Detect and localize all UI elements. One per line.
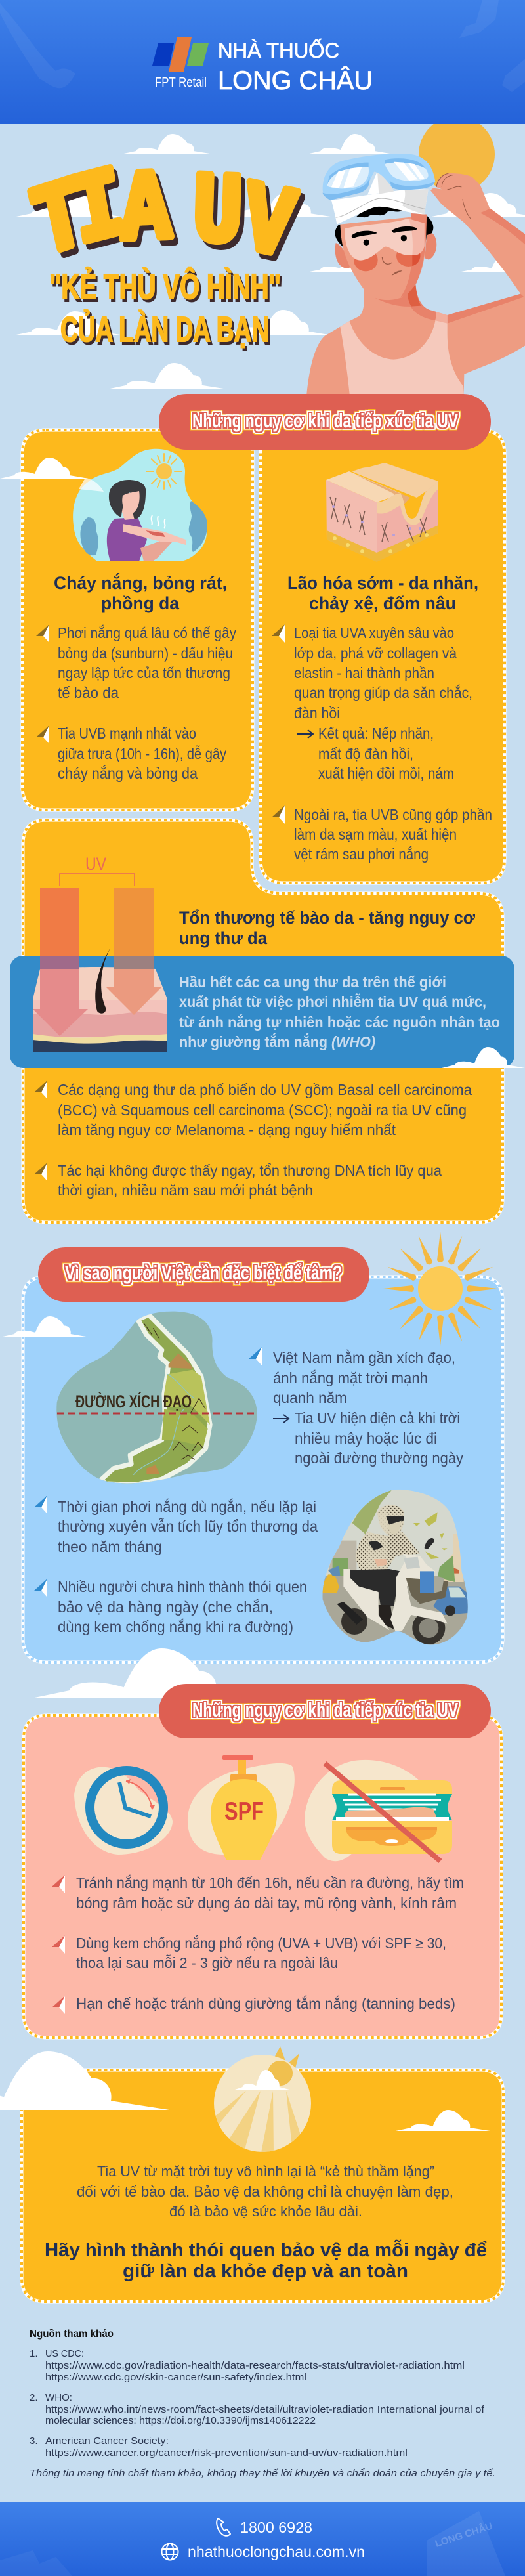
bullet: hidden harm <box>34 1162 442 1199</box>
arrow <box>273 1415 289 1423</box>
diagram: UV rays entering skin <box>33 854 167 1052</box>
icon: SPF bottle: SPF <box>224 1797 264 1826</box>
panel: why Vietnamese <box>0 1232 503 1662</box>
conclusion text: Tia UV từ mặt trời tuy vô hình lại là “kẻ thù thầm lặng” <box>97 2163 434 2179</box>
bullet: sunburn 2: giữa trưa (10h - 16h), dễ gây <box>58 745 226 762</box>
heading: chảy xệ, đốm nâu <box>309 593 456 613</box>
call to action <box>45 2239 487 2282</box>
bullet: aging 2: làm da sạm màu, xuất hiện <box>294 826 457 843</box>
bullet: avoid strong sun: Tránh nắng mạnh từ 10h đến 16h, nếu cần ra đường, hãy tìm <box>76 1874 464 1891</box>
bullet: cancer types <box>34 1081 472 1138</box>
reference 1: US CDC: <box>45 2348 84 2359</box>
logo: brand name: NHÀ THUỐC <box>218 39 339 62</box>
illustration: map with equator: ĐƯỜNG XÍCH ĐẠO <box>75 1391 192 1411</box>
bullet: sunscreen <box>52 1935 446 1971</box>
illustration: skin cross section <box>326 463 438 562</box>
storefront sign: LONG CHÂU <box>434 2520 494 2550</box>
result text: Kết quả: Nếp nhăn, <box>318 725 434 742</box>
footer banner <box>0 2502 525 2576</box>
bullet: aging 1: quan trọng giúp da săn chắc, <box>294 684 472 701</box>
bullet: daily habit: Nhiều người chưa hình thành thói quen <box>58 1578 307 1595</box>
callout text: như giường tắm nắng (WHO) <box>179 1033 375 1050</box>
bullet: sunburn 2: Tia UVB mạnh nhất vào <box>58 725 196 742</box>
heading: Tổn thương tế bào da - tăng nguy cơ <box>179 908 475 928</box>
bullet: tanning beds: Hạn chế hoặc tránh dùng giường tắm nắng (tanning beds) <box>76 1995 455 2012</box>
bullet: aging 1 <box>272 624 472 721</box>
disclaimer: Thông tin mang tính chất tham khảo, không thay thế lời khuyên và chẩn đoán của chuyên gia y tế. <box>30 2468 495 2479</box>
icon: SPF bottle <box>188 1755 295 1860</box>
panel: conclusion <box>0 2046 503 2302</box>
call to action: giữ làn da khỏe đẹp và an toàn <box>123 2261 408 2282</box>
reference 3 <box>30 2436 408 2458</box>
bullet: near equator <box>249 1347 455 1406</box>
panel: premature aging <box>261 430 505 883</box>
bullet: sunburn 2 <box>36 725 226 782</box>
bullet: aging 1: đàn hồi <box>294 704 340 721</box>
bullet: daily habit: dùng kem chống nắng khi ra đường) <box>58 1618 293 1635</box>
illustration: woman with sunburn <box>73 449 207 561</box>
cloud on panel <box>0 1316 90 1337</box>
logo: brand name: LONG CHÂU <box>218 66 373 95</box>
conclusion text: đó là bảo vệ sức khỏe lâu dài. <box>169 2203 362 2220</box>
panel: sunburn <box>0 430 253 810</box>
bullet: sunscreen: Dùng kem chống nắng phổ rộng (UVA + UVB) với SPF ≥ 30, <box>76 1935 446 1952</box>
bullet: aging 1: elastin - hai thành phần <box>294 664 434 681</box>
heading <box>287 573 478 613</box>
scene: clouds behind title <box>13 134 525 389</box>
bullet: sunscreen: thoa lại sau mỗi 2 - 3 giờ nếu ra ngoài lâu <box>76 1954 338 1971</box>
bullet: sunburn 1: tế bào da <box>58 684 119 701</box>
result text: ngoài đường thường ngày <box>295 1449 463 1467</box>
reference 1: 1. <box>30 2348 38 2359</box>
reference 2: molecular sciences: https://doi.org/10.3390/ijms140612222 <box>45 2415 316 2426</box>
bullet: avoid strong sun: bóng râm hoặc sử dụng áo dài tay, mũ rộng vành, kính râm <box>76 1895 457 1912</box>
website: nhathuoclongchau.com.vn <box>188 2543 365 2560</box>
result text: Tia UV hiện diện cả khi trời <box>295 1409 460 1427</box>
reference 2 <box>30 2392 485 2426</box>
callout text <box>179 974 500 1050</box>
reference 1: https://www.cdc.gov/skin-cancer/sun-safety/index.html <box>45 2372 306 2383</box>
icon: clock <box>74 1767 173 1855</box>
bullet: sunburn 1: ngay lập tức của tổn thương <box>58 664 230 681</box>
cloud large <box>0 2051 169 2110</box>
bullet: cumulative exposure: theo năm tháng <box>58 1538 162 1555</box>
logo: FPT Retail: FPT Retail <box>155 75 207 90</box>
callout text: xuất phát từ việc phơi nhiễm tia UV quá mức, <box>179 993 486 1010</box>
title: subtitle: CỦA LÀN DA BẠN <box>60 310 269 349</box>
bullet: avoid strong sun <box>52 1874 464 1912</box>
callout band <box>10 956 525 1068</box>
icon: phone <box>217 2518 230 2536</box>
bullet: near equator: quanh năm <box>273 1389 347 1406</box>
title: subtitle: "KẺ THÙ VÔ HÌNH" <box>49 267 281 307</box>
result text: xuất hiện đồi mồi, nám <box>318 765 454 782</box>
heading: Lão hóa sớm - da nhăn, <box>287 573 478 593</box>
phone number: 1800 6928 <box>240 2519 312 2536</box>
section pill: why Vietnamese: Vì sao người Việt cần đặc biệt để tâm? <box>65 1261 342 1284</box>
heading: ung thư da <box>179 928 267 948</box>
icon: no tanning bed <box>304 1760 452 1861</box>
sun icon <box>383 1232 497 1346</box>
cloud above protection panel <box>32 1648 266 1698</box>
reference 3: American Cancer Society: <box>45 2436 169 2447</box>
callout text: Hầu hết các ca ung thư da trên thế giới <box>179 974 446 991</box>
conclusion text: đối với tế bào da. Bảo vệ da không chỉ là chuyện làm đẹp, <box>77 2183 453 2200</box>
call to action: Hãy hình thành thói quen bảo vệ da mỗi ngày để <box>45 2239 487 2261</box>
reference 2: https://www.who.int/news-room/fact-sheets/detail/ultraviolet-radiation International journal of <box>45 2404 485 2415</box>
bullet: aging 1: lớp da, phá vỡ collagen và <box>294 645 457 662</box>
heading: phồng da <box>101 593 179 613</box>
bullet: aging 2: Ngoài ra, tia UVB cũng góp phần <box>294 806 492 823</box>
bullet: cancer types: Các dạng ung thư da phổ biến do UV gồm Basal cell carcinoma <box>58 1081 472 1098</box>
conclusion text <box>77 2163 453 2220</box>
reference 3: https://www.cancer.org/cancer/risk-prevention/sun-and-uv/uv-radiation.html <box>45 2447 408 2458</box>
bullet: sunburn 1: Phơi nắng quá lâu có thể gây <box>58 624 236 641</box>
bullet: daily habit: bảo vệ da hàng ngày (che chắn, <box>58 1599 273 1616</box>
reference 1 <box>30 2348 465 2383</box>
reference 2: WHO: <box>45 2392 72 2403</box>
diagram: UV rays entering skin: UV <box>85 854 106 874</box>
heading <box>54 573 227 613</box>
title: subtitle <box>49 267 281 349</box>
reference 1: https://www.cdc.gov/radiation-health/data-research/facts-stats/ultraviolet-radiation.html <box>45 2360 465 2371</box>
bullet: sunburn 1 <box>36 624 236 701</box>
logo: FPT Retail <box>152 37 209 90</box>
bullet: aging 2: vệt rám sau phơi nắng <box>294 846 429 863</box>
references heading: Nguồn tham khảo <box>30 2329 114 2340</box>
bullet: cumulative exposure: Thời gian phơi nắng dù ngắn, nếu lặp lại <box>58 1498 316 1515</box>
bullet: cumulative exposure <box>34 1495 318 1555</box>
heading <box>179 908 475 948</box>
heading: Cháy nắng, bỏng rát, <box>54 573 227 593</box>
illustration: masked motorbike rider <box>323 1489 468 1645</box>
bullet: daily habit <box>34 1578 307 1635</box>
result text: nhiều mây hoặc lúc đi <box>295 1430 437 1447</box>
section pill: risks <box>159 394 491 450</box>
icon: sun behind cloud <box>214 2046 311 2153</box>
cloud on panel <box>0 458 89 479</box>
arrow <box>297 730 313 738</box>
bullet: aging 1: Loại tia UVA xuyên sâu vào <box>294 624 454 641</box>
callout text: từ ánh nắng tự nhiên hoặc các nguồn nhân tạo <box>179 1013 500 1031</box>
cloud on callout <box>442 1047 525 1068</box>
section pill: protection <box>159 1684 491 1738</box>
cloud small <box>396 2110 490 2131</box>
result text: mất độ đàn hồi, <box>318 745 413 762</box>
bullet: aging 2 <box>272 805 492 863</box>
bullet: cancer types: làm tăng nguy cơ Melanoma - dạng nguy hiểm nhất <box>58 1121 396 1138</box>
illustration: sunburned man with goggles <box>306 154 525 394</box>
bullet: hidden harm: Tác hại không được thấy ngay, tổn thương DNA tích lũy qua <box>58 1162 442 1179</box>
bullet: near equator: Việt Nam nằm gần xích đạo, <box>273 1349 455 1366</box>
logo: brand name <box>218 39 373 95</box>
result text <box>318 725 454 782</box>
bullet: sunburn 2: cháy nắng và bỏng da <box>58 765 198 782</box>
header banner <box>0 0 525 124</box>
bullet: cumulative exposure: thường xuyên vẫn tích lũy tổn thương da <box>58 1518 318 1535</box>
reference 3: 3. <box>30 2436 38 2447</box>
section pill: why Vietnamese <box>38 1247 369 1302</box>
sun behind the man <box>419 116 495 192</box>
icon: globe <box>161 2543 178 2560</box>
illustration: map with equator <box>56 1312 257 1484</box>
panel: skin cell damage <box>10 820 525 1222</box>
result text <box>295 1409 463 1467</box>
bullet: near equator: ánh nắng mặt trời mạnh <box>273 1369 428 1386</box>
references <box>30 2329 495 2479</box>
bullet: sunburn 1: bỏng da (sunburn) - dấu hiệu <box>58 645 233 662</box>
reference 2: 2. <box>30 2392 38 2403</box>
bullet: hidden harm: thời gian, nhiều năm sau mới phát bệnh <box>58 1182 313 1199</box>
panel: protection tips <box>24 1715 501 2038</box>
bullet: cancer types: (BCC) và Squamous cell carcinoma (SCC); ngoài ra tia UV cũng <box>58 1102 467 1119</box>
